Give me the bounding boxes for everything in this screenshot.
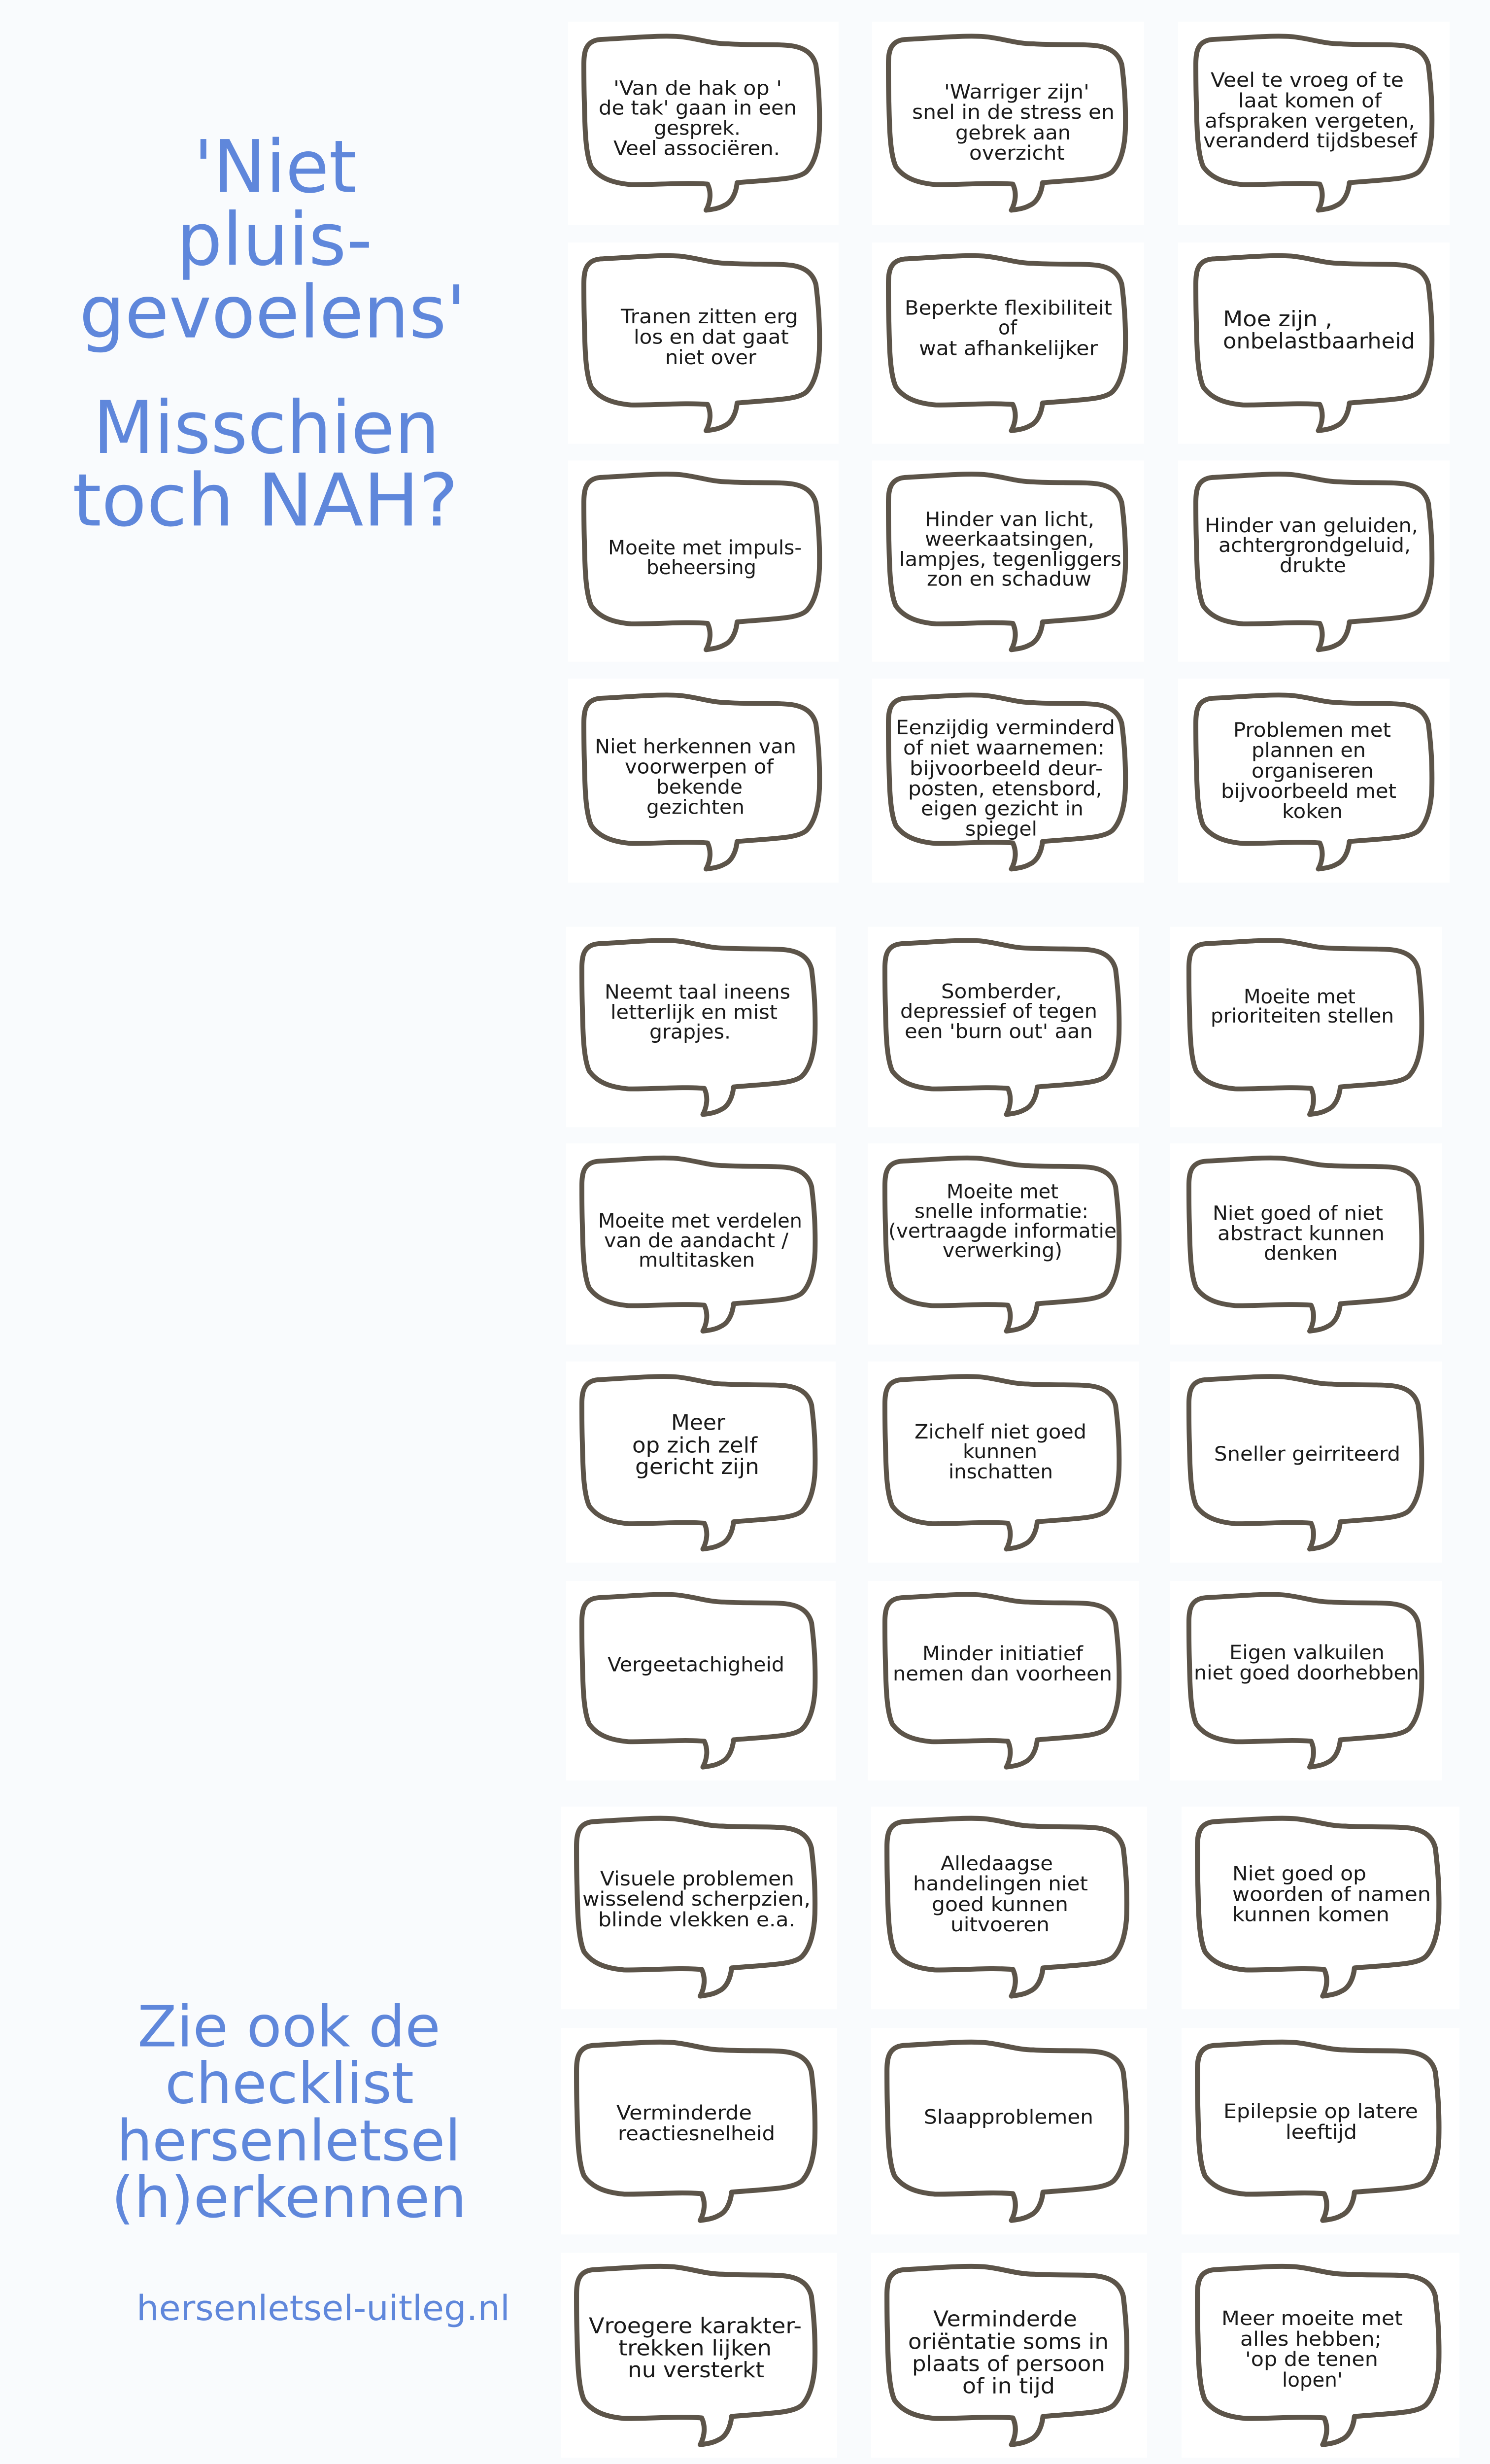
speech bubble: van de hak op de tak [568, 22, 839, 225]
speech bubble: van de hak op de tak: Veel associëren. [613, 137, 780, 160]
speech bubble: op de tenen lopen: lopen' [1282, 2368, 1343, 2392]
speech bubble: woorden en namen: Niet goed op [1232, 1862, 1366, 1885]
speech bubble: eenzijdig verminderd: bijvoorbeeld deur- [910, 757, 1103, 780]
speech bubble: niet herkennen [568, 679, 839, 883]
title: Niet pluis-gevoelens: pluis- [176, 198, 372, 282]
speech bubble: plannen en organiseren [1178, 679, 1450, 883]
speech bubble: van de hak op de tak: 'Van de hak op ' [613, 76, 782, 100]
speech bubble: niet herkennen: bekende [656, 775, 743, 798]
speech bubble: visuele problemen [561, 1807, 837, 2009]
speech bubble: eigen valkuilen: Eigen valkuilen [1229, 1641, 1385, 1664]
speech bubble: hinder van licht: Hinder van licht, [925, 508, 1094, 531]
title: Niet pluis-gevoelens [79, 125, 466, 355]
speech bubble: abstract denken: Niet goed of niet [1213, 1201, 1383, 1225]
speech bubble: hinder van licht [872, 461, 1144, 662]
speech bubble: op de tenen lopen: Meer moeite met [1221, 2306, 1403, 2330]
speech bubble: minder initiatief: Minder initiatief [922, 1642, 1084, 1665]
speech bubble: hinder van licht: weerkaatsingen, [925, 527, 1094, 550]
speech bubble: woorden en namen [1182, 1807, 1459, 2009]
speech bubble: eenzijdig verminderd: Eenzijdig verminderd [896, 716, 1115, 739]
speech bubble: taal letterlijk: letterlijk en mist [610, 1000, 778, 1024]
speech bubble: hinder van licht: zon en schaduw [927, 567, 1091, 590]
speech bubble: beperkte flexibiliteit: wat afhankelijker [919, 337, 1098, 360]
speech bubble: snelle informatie [868, 1143, 1139, 1345]
speech bubble: van de hak op de tak: gesprek. [654, 116, 741, 139]
speech bubble: visuele problemen: Visuele problemen [600, 1867, 794, 1890]
speech bubble: somberder: Somberder, [941, 980, 1062, 1003]
speech bubble: impulsbeheersing [568, 461, 839, 662]
text block: checklist reference: checklist [165, 2051, 414, 2117]
speech bubble: snelle informatie: snelle informatie: [914, 1199, 1088, 1223]
speech bubble: karaktertrekken: trekken lijken [618, 2336, 772, 2361]
speech bubble: slaapproblemen: Slaapproblemen [924, 2105, 1093, 2128]
speech bubble: karaktertrekken: nu versterkt [628, 2358, 764, 2383]
speech bubble: slaapproblemen [871, 2028, 1147, 2234]
speech bubble: alledaagse handelingen: Alledaagse [941, 1851, 1053, 1875]
speech bubble: niet herkennen: voorwerpen of [625, 755, 775, 778]
speech bubble: reactiesnelheid: Verminderde [616, 2101, 752, 2124]
speech bubble: plannen en organiseren: organiseren [1252, 759, 1374, 783]
subtitle: Misschien toch NAH? [72, 386, 458, 543]
speech bubble: hinder van licht: lampjes, tegenliggers [899, 548, 1121, 571]
speech bubble: impulsbeheersing: Moeite met impuls- [608, 536, 802, 559]
text block: checklist reference [111, 1994, 467, 2231]
speech bubble: multitasken [566, 1143, 836, 1345]
speech bubble: moe zijn [1178, 242, 1450, 444]
speech bubble: epilepsie: leeftijd [1286, 2120, 1357, 2144]
speech bubble: sneller geirriteerd [1170, 1362, 1442, 1563]
speech bubble: snelle informatie: verwerking) [943, 1238, 1062, 1262]
speech bubble: visuele problemen: wisselend scherpzien, [582, 1887, 811, 1911]
speech bubble: orientatie: oriëntatie soms in [908, 2329, 1109, 2354]
speech bubble: taal letterlijk: Neemt taal ineens [605, 980, 790, 1003]
speech bubble: alledaagse handelingen [871, 1807, 1147, 2009]
speech bubble: multitasken: multitasken [639, 1248, 755, 1271]
speech bubble: zichzelf inschatten: Zichelf niet goed [914, 1420, 1086, 1443]
speech bubble: tranen: Tranen zitten erg [620, 305, 798, 328]
speech bubble: somberder: depressief of tegen [900, 999, 1097, 1023]
speech bubble: abstract denken: denken [1264, 1241, 1338, 1265]
speech bubble: taal letterlijk [566, 927, 836, 1127]
speech bubble: tijdsbesef: afspraken vergeten, [1205, 109, 1415, 133]
title: Niet pluis-gevoelens: gevoelens' [79, 270, 466, 355]
speech bubble: woorden en namen: kunnen komen [1232, 1903, 1389, 1926]
speech bubble: eenzijdig verminderd: of niet waarnemen: [903, 736, 1105, 759]
speech bubble: somberder: een 'burn out' aan [905, 1020, 1093, 1043]
speech bubble: karaktertrekken: Vroegere karakter- [589, 2314, 802, 2338]
speech bubble: warriger zijn: 'Warriger zijn' [944, 80, 1089, 103]
speech bubble: eigen valkuilen [1170, 1581, 1442, 1780]
speech bubble: orientatie: Verminderde [933, 2307, 1077, 2332]
speech bubble: somberder [868, 927, 1139, 1127]
speech bubble: warriger zijn: snel in de stress en [912, 101, 1115, 124]
speech bubble: tranen: niet over [665, 346, 756, 369]
speech bubble: hinder van geluiden: drukte [1280, 554, 1346, 577]
speech bubble: beperkte flexibiliteit: Beperkte flexibiliteit [905, 296, 1112, 320]
speech bubble: op de tenen lopen [1182, 2253, 1459, 2458]
speech bubble: orientatie: of in tijd [962, 2374, 1055, 2398]
speech bubble: op de tenen lopen: alles hebben; [1240, 2327, 1382, 2351]
speech bubble: abstract denken: abstract kunnen [1218, 1222, 1385, 1245]
speech bubble: op zich zelf gericht: Meer [671, 1410, 726, 1435]
speech bubble: prioriteiten: prioriteiten stellen [1211, 1004, 1394, 1027]
speech bubble: multitasken: van de aandacht / [604, 1229, 788, 1252]
speech bubble: op zich zelf gericht [566, 1362, 836, 1563]
speech bubble: niet herkennen: Niet herkennen van [595, 735, 796, 758]
title: Niet pluis-gevoelens: 'Niet [194, 125, 357, 209]
speech bubble: tranen [568, 242, 839, 444]
speech bubble: op zich zelf gericht: gericht zijn [635, 1455, 759, 1479]
speech bubble: alledaagse handelingen: goed kunnen [932, 1892, 1068, 1916]
speech bubble: tijdsbesef [1178, 22, 1450, 225]
speech bubble: orientatie: plaats of persoon [912, 2352, 1105, 2376]
website url: hersenletsel-uitleg.nl [136, 2288, 510, 2328]
speech bubble: eenzijdig verminderd: eigen gezicht in [921, 797, 1084, 820]
speech bubble: eenzijdig verminderd: posten, etensbord, [908, 777, 1102, 800]
speech bubble: woorden en namen: woorden of namen [1232, 1882, 1431, 1906]
text block: checklist reference: hersenletsel [117, 2108, 461, 2174]
speech bubble: zichzelf inschatten: inschatten [948, 1460, 1053, 1483]
speech bubble: snelle informatie: Moeite met [947, 1180, 1058, 1203]
speech bubble: taal letterlijk: grapjes. [649, 1020, 731, 1043]
speech bubble: tijdsbesef: Veel te vroeg of te [1211, 68, 1404, 92]
speech bubble: eenzijdig verminderd: spiegel [965, 817, 1037, 840]
text block: checklist reference: Zie ook de [137, 1994, 440, 2060]
speech bubble: van de hak op de tak: de tak' gaan in een [599, 96, 797, 119]
speech bubble: vergeetachtigheid [566, 1581, 836, 1780]
speech bubble: beperkte flexibiliteit: of [998, 316, 1018, 340]
speech bubble: tranen: los en dat gaat [634, 325, 789, 348]
speech bubble: snelle informatie: (vertraagde informatie [888, 1219, 1117, 1243]
speech bubble: minder initiatief [868, 1581, 1139, 1780]
speech bubble: eigen valkuilen: niet goed doorhebben [1194, 1661, 1419, 1684]
text block: checklist reference: (h)erkennen [111, 2164, 467, 2231]
speech bubble: alledaagse handelingen: handelingen niet [913, 1872, 1088, 1895]
speech bubble: epilepsie [1182, 2028, 1459, 2234]
speech bubble: prioriteiten [1170, 927, 1442, 1127]
speech bubble: multitasken: Moeite met verdelen [598, 1209, 802, 1232]
speech bubble: epilepsie: Epilepsie op latere [1223, 2099, 1418, 2123]
speech bubble: plannen en organiseren: koken [1282, 800, 1343, 823]
speech bubble: impulsbeheersing: beheersing [646, 555, 756, 579]
speech bubble: tijdsbesef: laat komen of [1238, 89, 1383, 112]
speech bubble: moe zijn: Moe zijn , [1223, 307, 1332, 332]
speech bubble: plannen en organiseren: Problemen met [1233, 719, 1391, 742]
speech bubble: plannen en organiseren: bijvoorbeeld met [1221, 780, 1396, 803]
speech bubble: zichzelf inschatten: kunnen [963, 1439, 1037, 1463]
speech bubble: hinder van geluiden: achtergrondgeluid, [1219, 534, 1411, 557]
speech bubble: op de tenen lopen: 'op de tenen [1245, 2347, 1378, 2371]
speech bubble: prioriteiten: Moeite met [1244, 985, 1355, 1008]
speech bubble: plannen en organiseren: plannen en [1252, 739, 1366, 762]
speech bubble: reactiesnelheid [561, 2028, 837, 2234]
speech bubble: hinder van geluiden: Hinder van geluiden, [1205, 514, 1418, 537]
speech bubble: warriger zijn: overzicht [969, 141, 1065, 165]
speech bubble: moe zijn: onbelastbaarheid [1223, 329, 1415, 354]
speech bubble: sneller geirriteerd: Sneller geirriteerd [1214, 1442, 1400, 1466]
speech bubble: op zich zelf gericht: op zich zelf [632, 1433, 758, 1458]
speech bubble: minder initiatief: nemen dan voorheen [893, 1662, 1112, 1685]
subtitle: Misschien toch NAH?: toch NAH? [72, 458, 458, 543]
speech bubble: warriger zijn: gebrek aan [955, 121, 1071, 144]
speech bubble: beperkte flexibiliteit [872, 242, 1144, 444]
speech bubble: abstract denken [1170, 1143, 1442, 1345]
speech bubble: reactiesnelheid: reactiesnelheid [618, 2122, 775, 2145]
speech bubble: alledaagse handelingen: uitvoeren [950, 1913, 1050, 1936]
speech bubble: eenzijdig verminderd [872, 679, 1144, 883]
speech bubble: niet herkennen: gezichten [646, 795, 745, 819]
subtitle: Misschien toch NAH?: Misschien [93, 386, 440, 471]
speech bubble: warriger zijn [872, 22, 1144, 225]
speech bubble: tijdsbesef: veranderd tijdsbesef [1203, 129, 1418, 152]
speech bubble: zichzelf inschatten [868, 1362, 1139, 1563]
speech bubble: hinder van geluiden [1178, 461, 1450, 662]
speech bubble: karaktertrekken [561, 2253, 837, 2458]
speech bubble: vergeetachtigheid: Vergeetachigheid [608, 1653, 784, 1676]
speech bubble: orientatie [871, 2253, 1147, 2458]
speech bubble: visuele problemen: blinde vlekken e.a. [598, 1908, 795, 1931]
